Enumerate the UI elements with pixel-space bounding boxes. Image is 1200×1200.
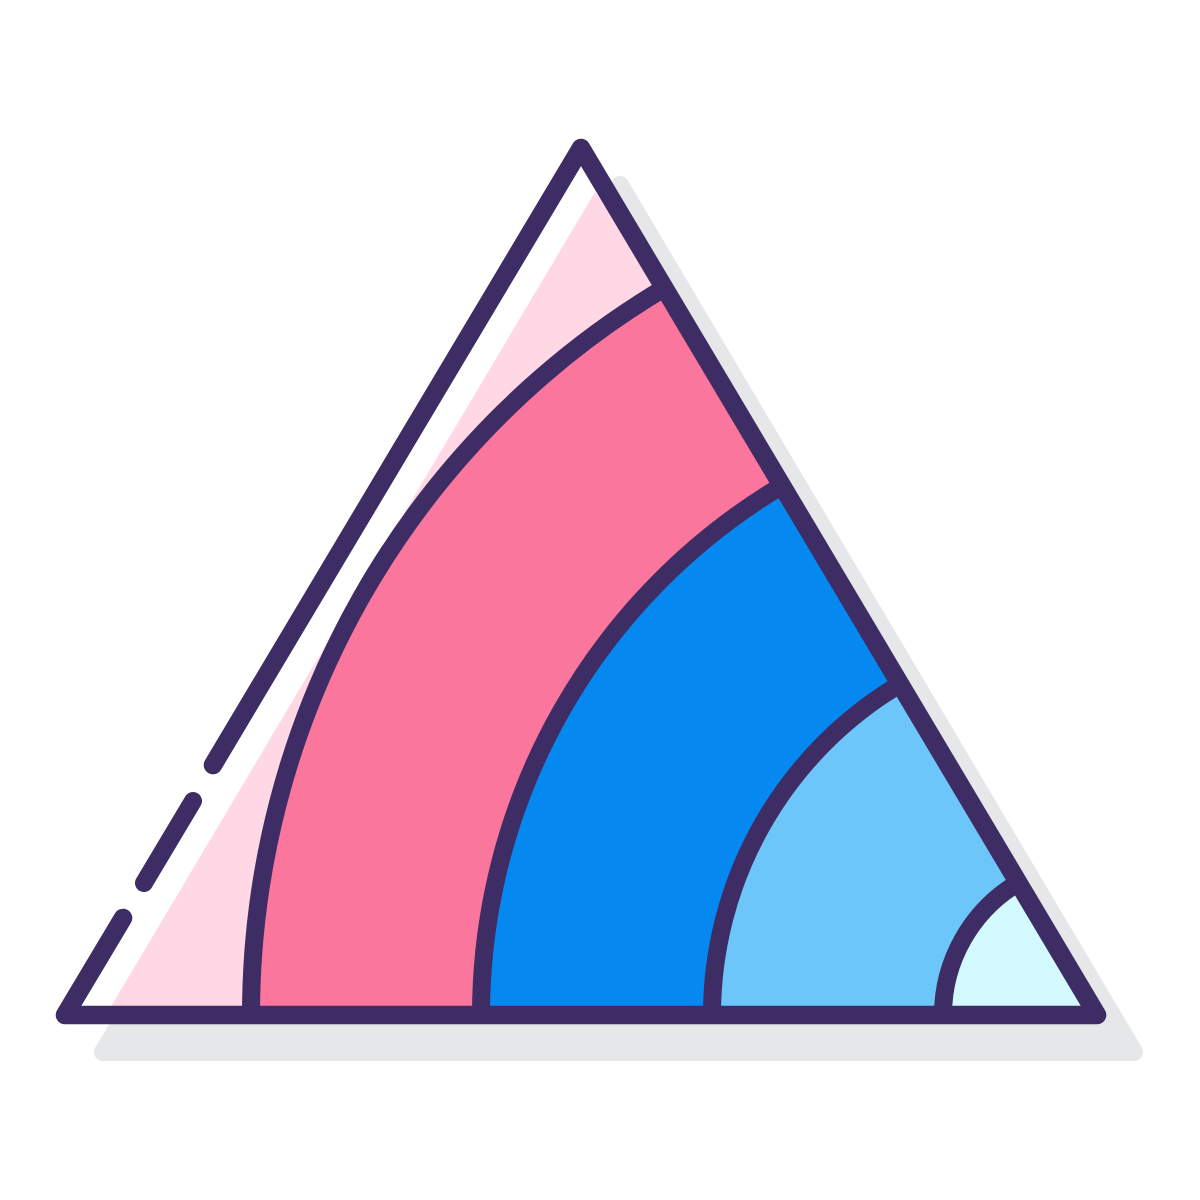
band: blue bbox=[481, 486, 900, 1015]
band: light blue bbox=[712, 684, 1018, 1015]
left edge dash bbox=[144, 801, 193, 883]
white triangle base bbox=[65, 148, 1097, 1015]
band: pink bbox=[251, 288, 782, 1015]
triangle outline with gaps bbox=[65, 148, 1097, 1015]
base edge bbox=[65, 1006, 1097, 1024]
drop shadow bbox=[103, 185, 1134, 1052]
arc: second bbox=[481, 486, 782, 1015]
outline: arcs and triangle bbox=[65, 148, 1097, 1015]
arc: outer bbox=[251, 288, 664, 1015]
arc: third bbox=[712, 684, 900, 1015]
arc: inner bbox=[943, 883, 1018, 1015]
band: pale cyan bbox=[943, 883, 1097, 1015]
band: pale pink outer bbox=[106, 192, 664, 1015]
